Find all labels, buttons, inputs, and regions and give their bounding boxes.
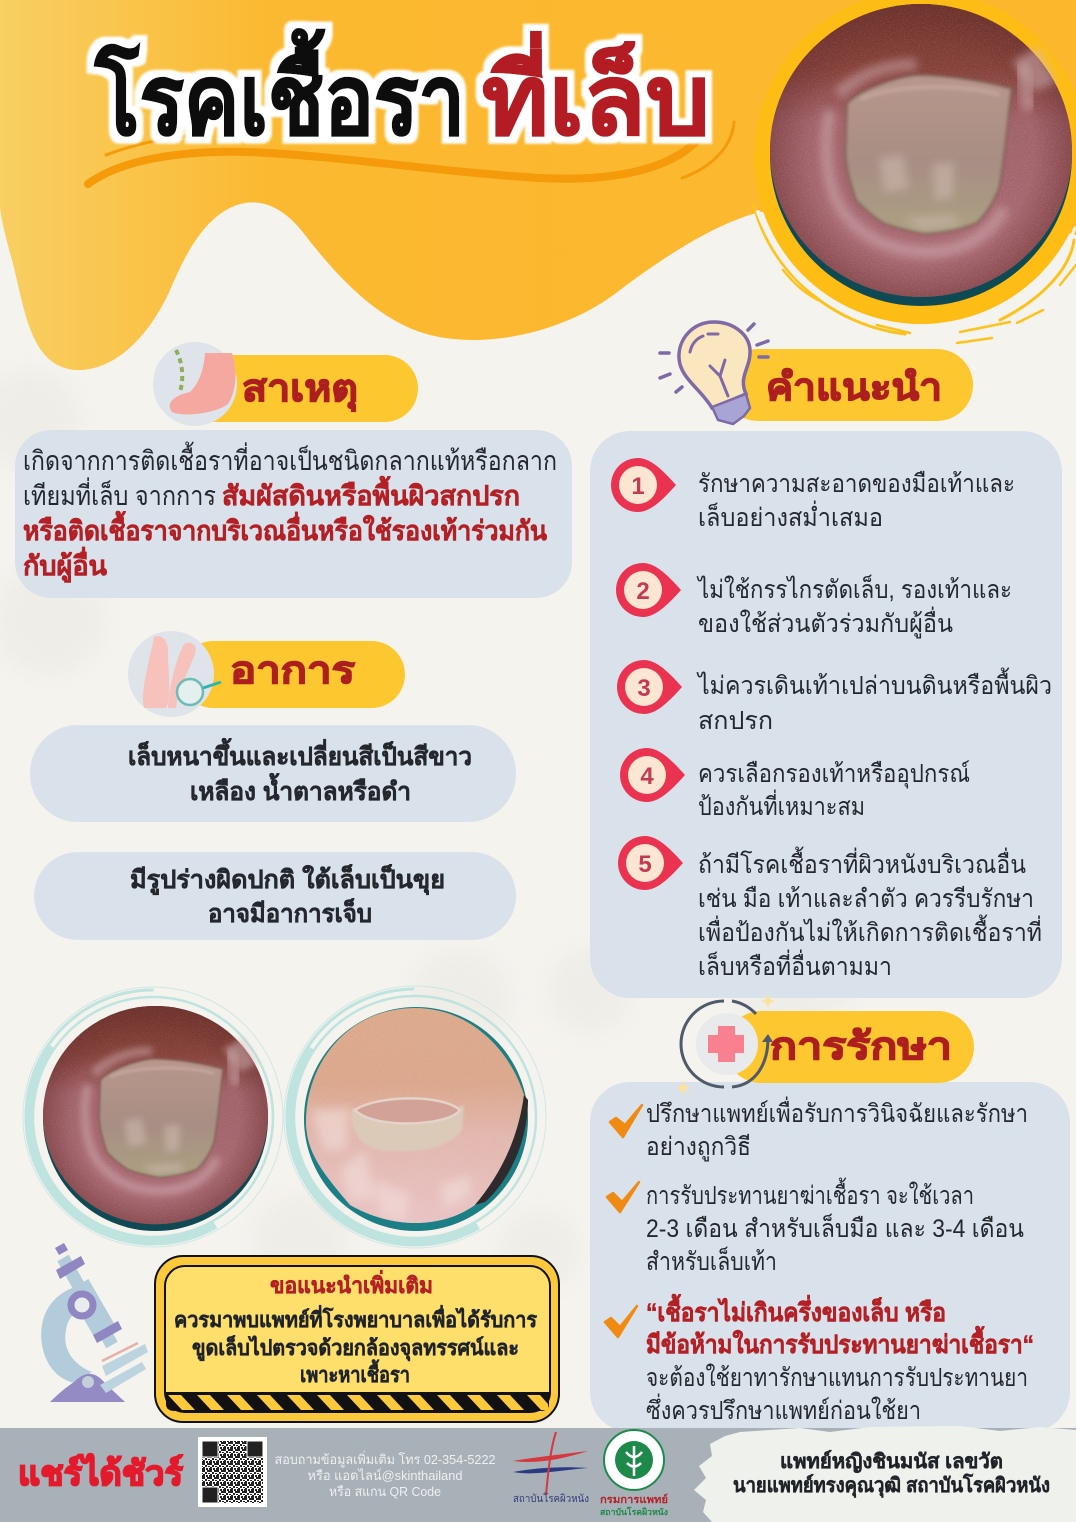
title red text: ที่เล็บ bbox=[482, 31, 710, 155]
symptom pill 1: เล็บหนาขึ้นและเปลี่ยนสีเป็นสีขาว bbox=[128, 737, 472, 771]
heading: causes bbox=[153, 342, 418, 426]
symptom pill 2 bbox=[34, 852, 516, 940]
heading text: สาเหตุ bbox=[242, 368, 358, 412]
item 1: รักษาความสะอาดของมือเท้าและ bbox=[698, 470, 1015, 498]
footer brush area bbox=[694, 1426, 1076, 1522]
logo: department of medical services bbox=[600, 1430, 668, 1517]
item 2 bbox=[616, 563, 1012, 639]
QR code bbox=[198, 1437, 267, 1507]
panel: advice bbox=[590, 431, 1062, 998]
treatment text 3: “เชื้อราไม่เกินครึ่งของเล็บ หรือ bbox=[646, 1293, 946, 1327]
heading text: การรักษา bbox=[770, 1026, 952, 1068]
authors bbox=[733, 1450, 1050, 1498]
callout: additional advice: ควรมาพบแพทย์ที่โรงพยาบาลเพื่อได้รับการ bbox=[174, 1304, 538, 1332]
symptom pill 1: เหลือง น้ำตาลหรือดำ bbox=[190, 772, 411, 806]
icon: feet with magnifier bbox=[128, 631, 221, 717]
item 5: เล็บหรือที่อื่นตามมา bbox=[698, 949, 892, 981]
authors: แพทย์หญิงชินมนัส เลขวัต bbox=[780, 1450, 1003, 1473]
footer bar bbox=[0, 1426, 1076, 1522]
header photo of infected nail with yellow scribble bbox=[754, 0, 1076, 343]
item 5: 5 bbox=[638, 851, 652, 878]
item 4: ควรเลือกรองเท้าหรืออุปกรณ์ bbox=[698, 760, 970, 789]
treatment text 3: มีข้อห้ามในการรับประทานยาฆ่าเชื้อรา“ bbox=[646, 1325, 1034, 1359]
check 3 bbox=[605, 1306, 637, 1337]
treatment text 2: สำหรับเล็บเท้า bbox=[646, 1246, 777, 1276]
callout: additional advice: เพาะหาเชื้อรา bbox=[300, 1359, 410, 1387]
panel: causes bbox=[15, 430, 572, 598]
check 1 bbox=[610, 1105, 642, 1137]
heading: symptoms bbox=[128, 631, 405, 717]
item 3: สกปรก bbox=[698, 707, 773, 735]
title bbox=[88, 28, 734, 184]
item 3: ไม่ควรเดินเท้าเปล่าบนดินหรือพื้นผิว bbox=[696, 667, 1052, 700]
treatment text 1: อย่างถูกวิธี bbox=[646, 1133, 751, 1162]
item 5: ถ้ามีโรคเชื้อราที่ผิวหนังบริเวณอื่น bbox=[698, 846, 1026, 879]
logo: department of medical services: กรมการแพทย์ bbox=[600, 1493, 668, 1506]
share slogan: แชร์ได้ชัวร์ bbox=[18, 1453, 184, 1493]
heading text: คำแนะนำ bbox=[766, 367, 942, 409]
icon: foot with fungus bbox=[153, 342, 237, 426]
photo: nail 1 in teal ring bbox=[0, 948, 322, 1286]
logo: department of medical services: สถาบันโรคผิวหนัง bbox=[600, 1506, 668, 1517]
item 4: 4 bbox=[640, 763, 654, 790]
icon: microscope bbox=[41, 1243, 148, 1402]
title underline swoosh bbox=[88, 122, 734, 184]
item 2: ของใช้ส่วนตัวร่วมกับผู้อื่น bbox=[698, 606, 953, 639]
panel: causes: สัมผัสดินหรือพื้นผิวสกปรก bbox=[222, 475, 520, 511]
item 4 bbox=[620, 748, 970, 821]
contact text: สอบถามข้อมูลเพิ่มเติม โทร 02-354-5222 bbox=[274, 1451, 496, 1468]
treatment text 2: การรับประทานยาฆ่าเชื้อรา จะใช้เวลา bbox=[646, 1177, 974, 1210]
item 3 bbox=[617, 660, 1052, 735]
panel: causes: เกิดจากการติดเชื้อราที่อาจเป็นชนิดกลากแท้หรือกลาก bbox=[23, 441, 557, 476]
heading text: อาการ bbox=[230, 650, 356, 692]
item 3: 3 bbox=[637, 675, 651, 702]
panel: causes: เทียมที่เล็บ จากการ bbox=[23, 477, 216, 511]
authors: นายแพทย์ทรงคุณวุฒิ สถาบันโรคผิวหนัง bbox=[733, 1473, 1050, 1498]
contact text: หรือ แอดไลน์@skinthailand bbox=[308, 1468, 462, 1483]
item 5: เช่น มือ เท้าและลำตัว ควรรีบรักษา bbox=[698, 885, 1034, 913]
item 5 bbox=[618, 836, 1042, 981]
check 2 bbox=[607, 1182, 639, 1212]
icon: light bulb bbox=[660, 322, 768, 424]
treatment text 3: ซึ่งควรปรึกษาแพทย์ก่อนใช้ยา bbox=[646, 1393, 921, 1425]
icon: medical cross bbox=[676, 994, 775, 1095]
item 5: เพื่อป้องกันไม่ให้เกิดการติดเชื้อราที่ bbox=[698, 914, 1042, 947]
logo: institute of dermatology: สถาบันโรคผิวหนัง bbox=[513, 1492, 589, 1505]
treatment text 3 bbox=[646, 1293, 1034, 1425]
contact text: หรือ สแกน QR Code bbox=[329, 1484, 441, 1499]
item 1 bbox=[611, 458, 1015, 532]
treatment text 1: ปรึกษาแพทย์เพื่อรับการวินิจฉัยและรักษา bbox=[646, 1096, 1028, 1128]
hazard stripes bbox=[166, 1392, 549, 1411]
symptom pill 2: มีรูปร่างผิดปกติ ใต้เล็บเป็นขุย bbox=[130, 864, 445, 896]
panel: causes: หรือติดเชื้อราจากบริเวณอื่นหรือใช้รองเท้าร่วมกัน bbox=[23, 510, 547, 546]
item 4: ป้องกันที่เหมาะสม bbox=[698, 789, 865, 821]
logo: institute of dermatology bbox=[513, 1432, 589, 1505]
treatment text 2: 2-3 เดือน สำหรับเล็บมือ และ 3-4 เดือน bbox=[646, 1213, 1024, 1243]
callout: additional advice: ขูดเล็บไปตรวจด้วยกล้องจุลทรรศน์และ bbox=[192, 1334, 519, 1362]
treatment text 2 bbox=[646, 1177, 1024, 1276]
item 1: 1 bbox=[631, 473, 645, 500]
item 1: เล็บอย่างสม่ำเสมอ bbox=[698, 500, 883, 532]
heading: advice bbox=[660, 322, 973, 424]
title black text: โรคเชื้อรา bbox=[94, 28, 465, 155]
item 2: ไม่ใช้กรรไกรตัดเล็บ, รองเท้าและ bbox=[696, 574, 1012, 604]
symptom pill 1 bbox=[30, 725, 516, 822]
treatment text 1 bbox=[646, 1096, 1028, 1162]
symptom pill 2: อาจมีอาการเจ็บ bbox=[208, 898, 372, 928]
heading: treatment bbox=[676, 994, 974, 1095]
panel: treatment bbox=[590, 1082, 1070, 1432]
panel: causes: กับผู้อื่น bbox=[23, 546, 108, 583]
orange header blob bbox=[0, 0, 1076, 370]
callout: additional advice bbox=[155, 1256, 559, 1422]
callout: additional advice: ขอแนะนำเพิ่มเติม bbox=[270, 1269, 433, 1298]
contact text bbox=[274, 1451, 496, 1499]
item 2: 2 bbox=[636, 578, 650, 605]
photo: nail 2 in teal ring bbox=[284, 986, 546, 1248]
